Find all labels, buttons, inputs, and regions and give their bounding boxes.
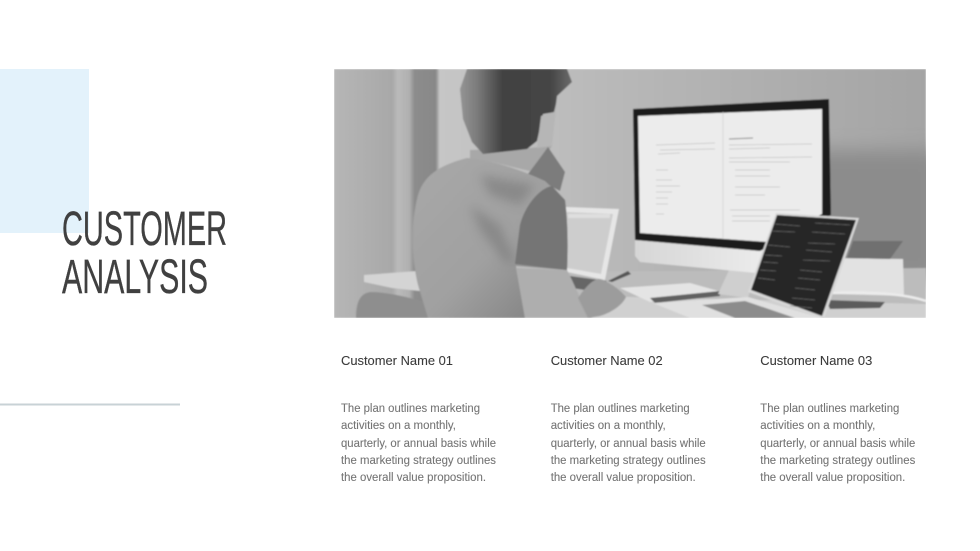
accent: horizontal rule [0,404,180,406]
body 03: The plan outlines marketing [760,401,899,415]
body 02: quarterly, or annual basis while [551,436,706,450]
name 03: Customer Name 03 [760,353,872,368]
column: customer 03 [760,353,915,484]
person: hair [460,69,572,154]
front laptop: keyboard [702,301,795,318]
body 03: quarterly, or annual basis while [760,436,915,450]
monitor: aluminium chin [635,238,768,273]
monitor: screen [638,109,822,242]
front laptop: base [653,297,822,318]
monitor: stand [717,270,754,298]
box with slab on desk [832,241,904,296]
front laptop: screen text [758,223,850,308]
monitor: bezel [633,99,831,251]
front laptop: screen frame [749,213,860,306]
person: hand at chin [528,147,565,191]
body 01: the overall value proposition. [341,470,486,484]
name 01: Customer Name 01 [341,353,453,368]
person: arm [516,268,592,318]
body 03 [760,401,915,484]
body 01: the marketing strategy outlines [341,453,496,467]
body 02: the overall value proposition. [551,470,696,484]
column: customer 02 [551,353,706,484]
photo background: shadow on wall [829,141,926,287]
monitor: screen text [656,112,812,238]
person: sleeve [515,186,568,270]
accent: pale blue block [0,69,89,233]
title: ANALYSIS [62,251,208,304]
pen on desk [650,291,720,303]
body 01: quarterly, or annual basis while [341,436,496,450]
photo background: wall [440,69,926,318]
chair [356,292,413,318]
person: hand on keyboard [578,279,626,318]
title: CUSTOMER [62,203,227,256]
body 02: The plan outlines marketing [551,401,690,415]
body 01: activities on a monthly, [341,418,456,432]
person: neck [470,146,552,172]
body 01: The plan outlines marketing [341,401,480,415]
front laptop: screen [751,215,856,316]
body 02: activities on a monthly, [551,418,666,432]
person: face edge [538,106,556,130]
body 03: activities on a monthly, [760,418,875,432]
body 03: the overall value proposition. [760,470,905,484]
desk: foreground light strip [590,296,926,318]
rear laptop [566,207,631,290]
title [62,203,227,304]
body 01 [341,401,496,484]
cables shadow [826,300,885,309]
cable [830,293,926,301]
name 02: Customer Name 02 [551,353,663,368]
person: shirt fold shadows [470,175,535,262]
desk left end [364,271,420,291]
papers on desk [620,283,722,302]
body 03: the marketing strategy outlines [760,453,915,467]
body 02: the marketing strategy outlines [551,453,706,467]
column: customer 01 [341,353,496,484]
person: shirt [413,158,568,318]
desk [670,268,926,304]
body 02 [551,401,706,484]
photo: person at desk with monitor and laptops [334,69,940,319]
photo background: curtain [334,69,440,318]
